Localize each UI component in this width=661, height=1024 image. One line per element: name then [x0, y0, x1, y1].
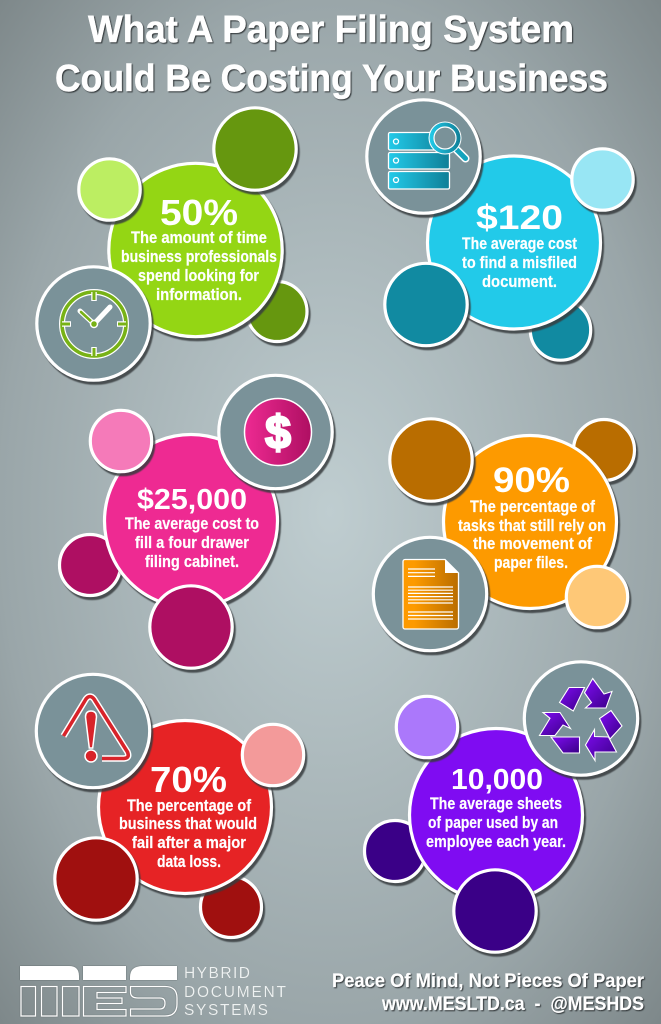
text: 90% description: The percentage of [470, 498, 595, 516]
text: 90% description: paper files. [494, 554, 568, 572]
text: 70% description: The percentage of [127, 797, 251, 815]
text: $120 description: document. [482, 273, 557, 291]
stat: 70%: 70% [150, 759, 227, 800]
title [55, 9, 608, 100]
text: 10,000 description: The average sheets [430, 795, 562, 813]
tagline and contact: Peace Of Mind, Not Pieces Of Paper [332, 971, 645, 992]
text: 70% description: business that would [119, 815, 257, 833]
text: 50% description: information. [156, 286, 242, 304]
logo: MES Hybrid Document Systems: HYBRID [184, 965, 250, 982]
title: Could Be Costing Your Business [55, 58, 608, 100]
text: $120 description [462, 235, 577, 291]
panel: 90% paper tasks [373, 419, 634, 651]
icon: dollar coin [244, 398, 312, 466]
stat: $25,000: $25,000 [137, 484, 247, 516]
text: 50% description: business professionals [121, 248, 277, 266]
text: 90% description: the movement of [473, 535, 592, 553]
panel: 10,000 sheets [364, 662, 638, 952]
text: $25,000 description: filing cabinet. [145, 553, 239, 571]
stat: 90%: 90% [493, 461, 570, 500]
text: 50% description: spend looking for [138, 267, 259, 285]
icon: dollar coin: $ [265, 406, 291, 458]
text: $120 description: to find a misfiled [462, 254, 577, 272]
text: 50% description [121, 229, 277, 304]
text: 10,000 description [426, 795, 566, 851]
text: 90% description [458, 498, 606, 572]
text: $25,000 description [125, 515, 259, 571]
tagline and contact: www.MESLTD.ca - @MESHDS [381, 994, 644, 1015]
text: 10,000 description: employee each year. [426, 833, 566, 851]
text: 70% description [119, 797, 257, 871]
stat: $120: $120 [476, 199, 563, 237]
logo: MES Hybrid Document Systems [20, 965, 287, 1019]
stat: 50%: 50% [160, 192, 238, 233]
text: 50% description: The amount of time [131, 229, 267, 247]
text: $25,000 description: The average cost to [125, 515, 259, 533]
logo: MES Hybrid Document Systems: SYSTEMS [184, 1002, 268, 1019]
icon: recycle arrows [540, 678, 622, 760]
text: $25,000 description: fill a four drawer [135, 534, 250, 552]
panel: $25,000 filing cabinet [60, 375, 332, 668]
panel: 50% of time [37, 108, 307, 380]
panel: 70% data loss [36, 674, 304, 938]
icon: clock [62, 292, 126, 356]
stat: 10,000: 10,000 [451, 764, 543, 796]
panel: $120 misfiled document [367, 100, 633, 360]
icon: document [403, 560, 458, 629]
text: $120 description: The average cost [462, 235, 577, 253]
text: 70% description: fail after a major [132, 834, 247, 852]
text: 90% description: tasks that still rely on [458, 517, 606, 535]
title: What A Paper Filing System [88, 9, 574, 51]
logo: MES Hybrid Document Systems: DOCUMENT [184, 984, 287, 1001]
text: 10,000 description: of paper used by an [428, 814, 558, 832]
text: 70% description: data loss. [157, 853, 221, 871]
icon: warning triangle [64, 696, 128, 762]
tagline and contact [332, 971, 645, 1015]
icon: server and magnifier [388, 122, 466, 189]
